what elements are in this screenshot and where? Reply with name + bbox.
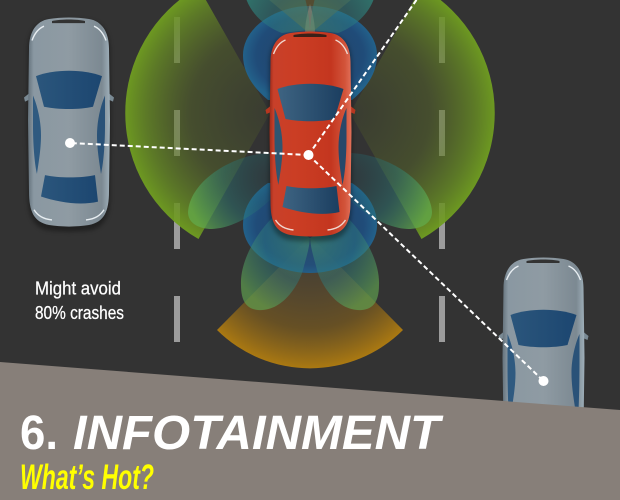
subtitle: What’s Hot? (20, 458, 154, 497)
sensor lobe: side right (348, 153, 432, 229)
sensor cone: rear amber (217, 236, 403, 368)
callout text (35, 278, 124, 323)
sensor lobe: rear left (241, 217, 310, 310)
car: red centre (266, 32, 356, 242)
callout text: Might avoid (35, 278, 121, 298)
sensor: rear blue (243, 183, 377, 273)
sensor cone: right green (350, 0, 495, 239)
sensor lobe: front right (310, 0, 375, 33)
connection dots (65, 138, 548, 386)
car: gray right (498, 258, 588, 428)
callout text: 80% crashes (35, 302, 124, 323)
sensor: front blue (243, 6, 377, 100)
title: INFOTAINMENT (73, 407, 444, 460)
sensor: front wedge (262, 0, 358, 34)
sensor lobe: side left (188, 153, 272, 229)
bottom band (0, 362, 620, 500)
connection lines (70, 0, 544, 381)
lane markings (174, 17, 445, 342)
sensor lobe: front left (245, 0, 310, 33)
sensor cone: left green (125, 0, 270, 239)
sensor lobe: rear right (310, 217, 379, 310)
title: 6. (20, 407, 58, 460)
sensor: front centre spire (305, 4, 315, 33)
car: gray left (24, 17, 114, 232)
